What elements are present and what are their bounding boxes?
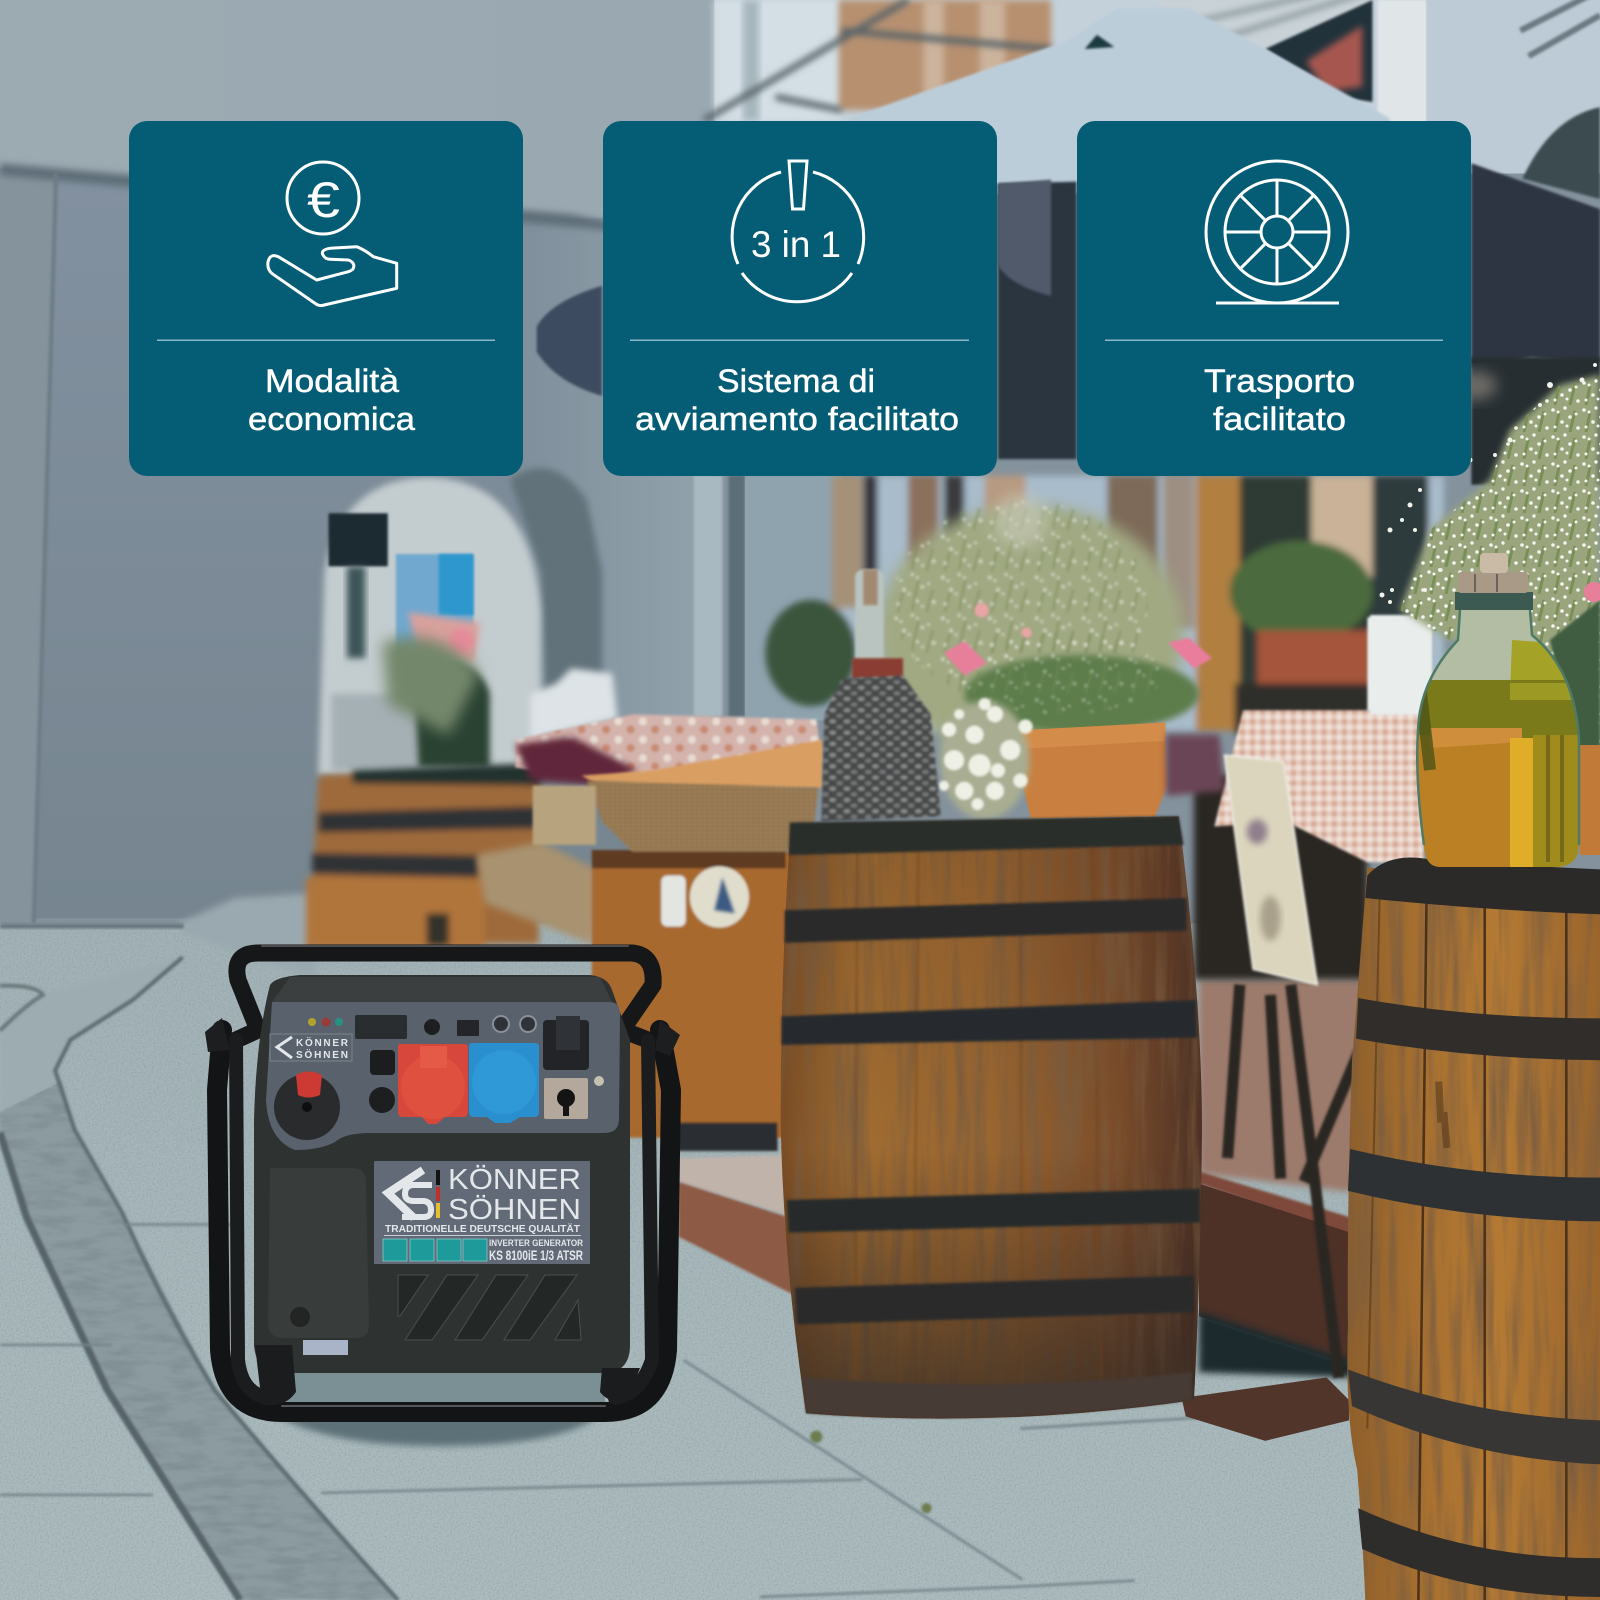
ground shadow	[275, 1415, 600, 1446]
feature badges	[383, 1239, 487, 1261]
flower pot plant	[878, 494, 1212, 819]
bread basket and tablecloth	[515, 714, 822, 852]
right deck, easel, menu board	[1166, 617, 1431, 1441]
storefront behind plants	[765, 476, 1444, 735]
label: Sistema di	[717, 363, 875, 399]
divider	[1105, 340, 1443, 341]
glass outline	[1417, 610, 1579, 845]
brand plate: KS 8100iE 1/3 ATSR	[489, 1247, 583, 1263]
label: economica	[248, 401, 415, 437]
blue socket	[469, 1043, 539, 1123]
pavement with kerb and slabs	[0, 893, 1600, 1600]
panel: Trasporto facilitato	[1077, 121, 1471, 476]
panel logo: KÖNNER	[296, 1036, 349, 1049]
label: facilitato	[1213, 401, 1346, 437]
white card behind bottle	[1370, 615, 1432, 715]
feet	[255, 1345, 640, 1405]
wooden table and cabinet	[477, 842, 791, 1151]
red socket	[398, 1044, 468, 1124]
cork stopper	[1458, 572, 1528, 593]
divider	[157, 340, 495, 341]
brand plate: SÖHNEN	[448, 1194, 581, 1226]
kerb strip	[0, 957, 398, 1600]
building wall	[0, 0, 842, 923]
selector switch	[544, 1078, 588, 1119]
body	[254, 975, 630, 1373]
divider	[630, 340, 969, 341]
panel logo: SÖHNEN	[296, 1048, 348, 1061]
panel logo	[270, 1034, 352, 1061]
KS logo mark	[388, 1170, 423, 1218]
icon: 3 in 1 power button	[732, 161, 864, 302]
tube frame	[217, 946, 671, 1412]
under-body shadow	[285, 1373, 605, 1405]
model: INVERTER GENERATOR	[489, 1238, 583, 1248]
serial sticker	[303, 1340, 348, 1355]
panel: Modalità economica	[129, 121, 523, 476]
display	[355, 1015, 407, 1039]
deck step left	[679, 1155, 796, 1296]
label	[248, 363, 415, 437]
handles clips	[205, 1018, 680, 1056]
bottle contents	[1418, 610, 1579, 867]
brand name: KÖNNER	[448, 1164, 581, 1196]
indicator lamps	[308, 1018, 316, 1026]
label: Modalità	[265, 363, 399, 399]
icon: wheel	[1206, 161, 1348, 303]
white blossoms	[939, 698, 1033, 819]
panel: Sistema di avviamento facilitato	[603, 121, 997, 476]
icon: hand holding euro coin: €	[307, 172, 340, 228]
slogan: TRADITIONELLE DEUTSCHE QUALITÄT	[385, 1222, 580, 1235]
right oak barrel	[1347, 858, 1600, 1600]
wine bottle in wicker	[821, 569, 941, 821]
label: Trasporto	[1204, 363, 1355, 399]
generator	[205, 946, 680, 1446]
icon: 3 in 1 power button: 3 in 1	[751, 224, 841, 265]
centre oak barrel	[781, 816, 1202, 1419]
label	[635, 363, 959, 437]
brand plate	[374, 1161, 590, 1264]
flowering plant	[1379, 363, 1600, 855]
control panel	[266, 1002, 620, 1150]
icon: hand holding euro coin	[268, 162, 397, 306]
left background barrel	[306, 763, 541, 949]
collar	[1455, 592, 1533, 610]
label: avviamento facilitato	[635, 401, 959, 437]
vent slots	[398, 1275, 581, 1340]
storage hatch	[268, 1168, 369, 1338]
white arch with blurred plant	[318, 478, 617, 776]
upper buildings and parasol	[537, 0, 1600, 485]
right plant and oil bottle, drawn in source pixels	[1370, 363, 1600, 875]
dial	[274, 1074, 340, 1140]
black socket	[543, 1016, 589, 1070]
olive oil bottle	[1410, 553, 1585, 875]
label	[1204, 363, 1355, 437]
flag stripe	[436, 1170, 440, 1185]
